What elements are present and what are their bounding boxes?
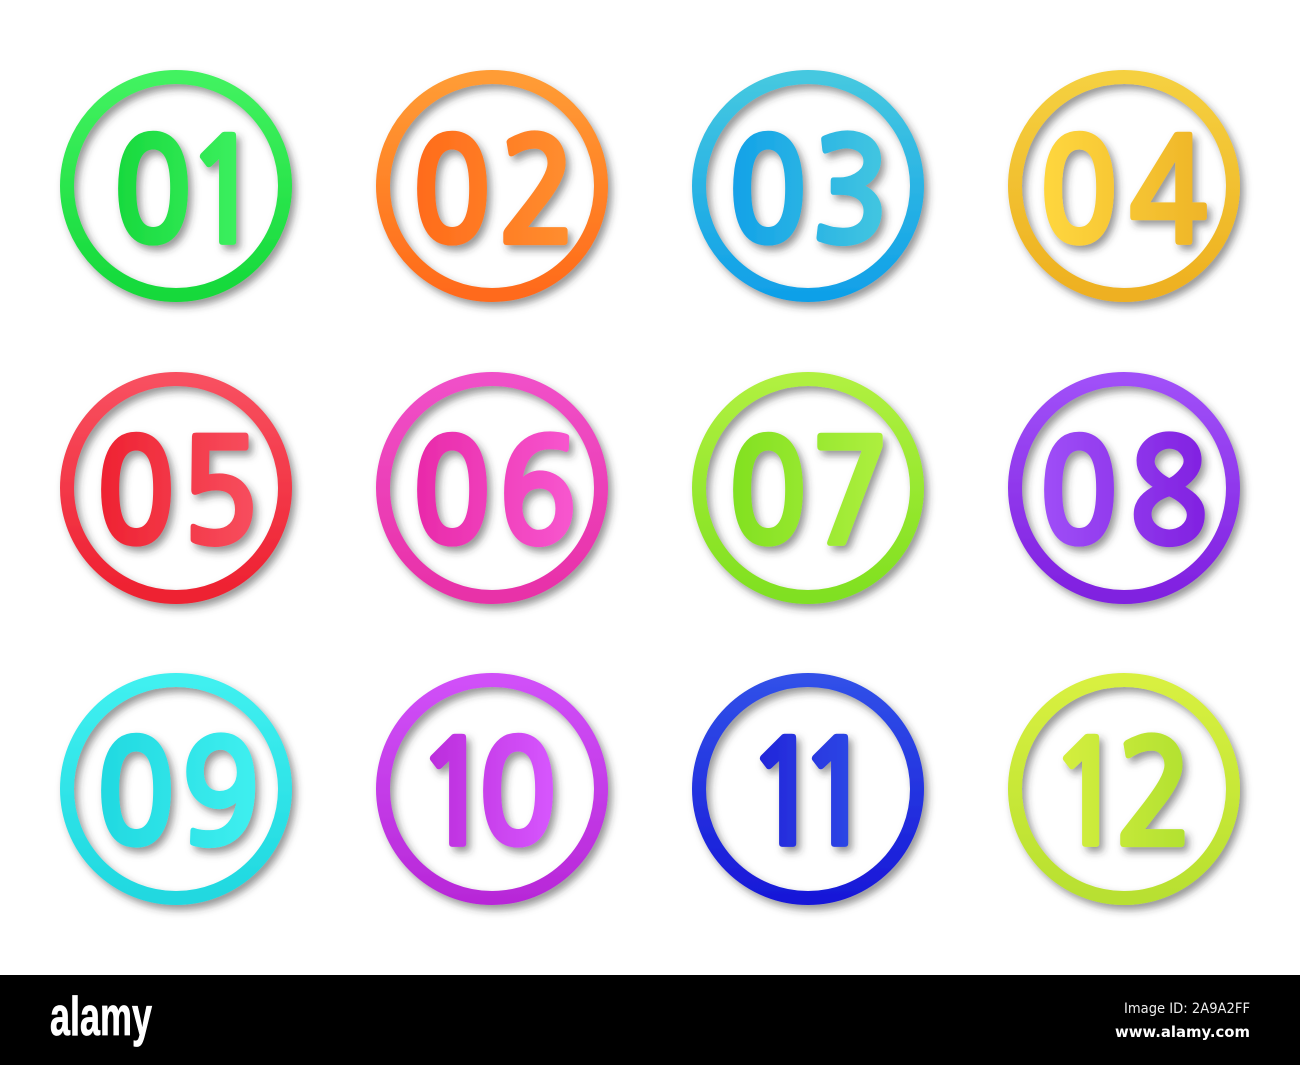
badge 12 [1015, 680, 1233, 898]
badge 10 [383, 680, 601, 898]
badge 02: 02 [411, 122, 578, 265]
badge 01: 01 [112, 122, 265, 265]
badge 11: 11 [744, 724, 877, 867]
badge 06 [383, 379, 601, 597]
image id: Image ID: 2A9A2FF [1124, 1001, 1250, 1017]
badge 03 [699, 77, 917, 295]
badge 01 [67, 77, 285, 295]
badge 07: 07 [727, 423, 891, 566]
badge 10: 10 [414, 724, 558, 867]
badge 03: 03 [727, 122, 891, 265]
badge 04 [1015, 77, 1233, 295]
badge 11 [699, 680, 917, 898]
alamy logo: alamy [50, 985, 152, 1047]
badge 06: 06 [411, 423, 578, 566]
badge 09: 09 [95, 724, 261, 867]
badge 08 [1015, 379, 1233, 597]
website: www.alamy.com [1115, 1023, 1250, 1041]
badge 05: 05 [95, 423, 260, 566]
badge 09 [67, 680, 285, 898]
badge 02 [383, 77, 601, 295]
badge 07 [699, 379, 917, 597]
footer bar [0, 975, 1300, 1065]
badge 05 [67, 379, 285, 597]
badge 08: 08 [1038, 423, 1209, 566]
badge 04: 04 [1038, 122, 1209, 265]
badge 12: 12 [1047, 724, 1195, 867]
